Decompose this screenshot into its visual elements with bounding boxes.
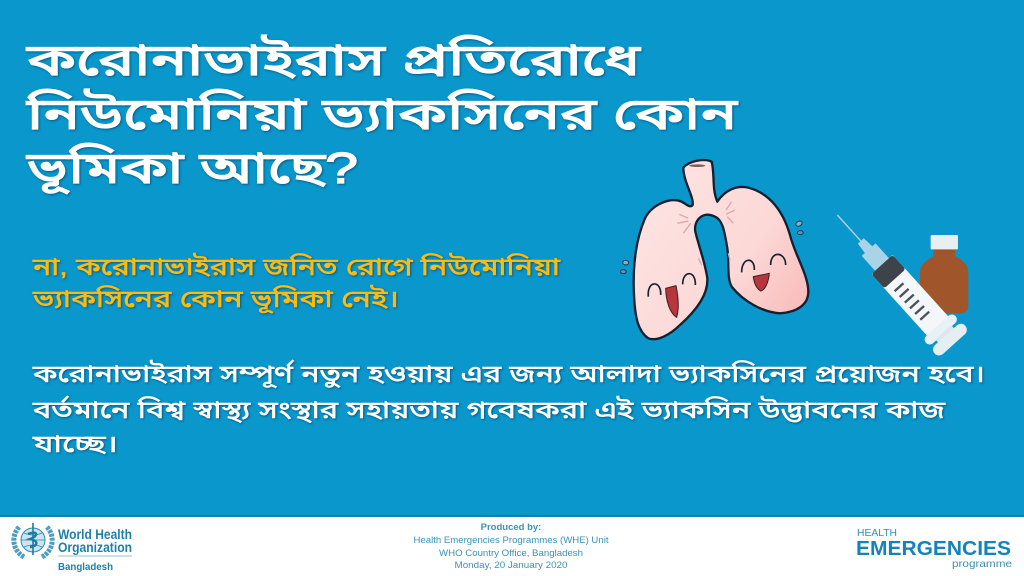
icon: vaccine bottle	[920, 235, 968, 313]
answer text (yellow): ভ্যাকসিনের কোন ভূমিকা নেই।	[32, 285, 399, 314]
footer: WHO wordmark	[58, 526, 132, 573]
footer: production credit: Monday, 20 January 2020	[454, 560, 568, 571]
explanation text	[32, 359, 985, 458]
footer: production credit: Health Emergencies Programmes (WHE) Unit	[414, 535, 609, 546]
footer: production credit	[414, 522, 609, 571]
title: ভূমিকা আছে?	[26, 142, 358, 195]
icon: smiling lungs	[620, 160, 808, 339]
footer: Health Emergencies programme logo	[856, 527, 1012, 570]
right lung face	[742, 254, 786, 272]
footer: production credit: WHO Country Office, Bangladesh	[439, 548, 583, 559]
answer text (yellow): না, করোনাভাইরাস জনিত রোগে নিউমোনিয়া	[32, 253, 561, 281]
footer: Health Emergencies programme logo: HEALTH	[857, 527, 897, 539]
sweat drops	[623, 260, 629, 265]
left lung face	[648, 274, 695, 297]
title: নিউমোনিয়া ভ্যাকসিনের কোন	[26, 88, 738, 139]
footer: Health Emergencies programme logo: EMERGENCIES	[856, 537, 1011, 560]
footer: production credit: Produced by:	[481, 522, 541, 533]
icon: syringe	[822, 201, 969, 358]
footer: WHO wordmark: World Health	[58, 526, 132, 542]
title	[26, 34, 738, 195]
footer: WHO emblem	[14, 523, 52, 557]
explanation text: করোনাভাইরাস সম্পূর্ণ নতুন হওয়ায় এর জন্য আলাদা ভ্যাকসিনের প্রয়োজন হবে।	[32, 359, 985, 389]
explanation text: যাচ্ছে।	[32, 431, 118, 458]
footer: Health Emergencies programme logo: programme	[952, 558, 1012, 570]
answer text (yellow)	[32, 253, 561, 314]
footer: WHO wordmark: Organization	[58, 539, 132, 555]
footer: WHO wordmark: Bangladesh	[58, 561, 113, 573]
title: করোনাভাইরাস প্রতিরোধে	[26, 34, 641, 85]
explanation text: বর্তমানে বিশ্ব স্বাস্থ্য সংস্থার সহায়তায় গবেষকরা এই ভ্যাকসিন উদ্ভাবনের কাজ	[32, 395, 945, 424]
